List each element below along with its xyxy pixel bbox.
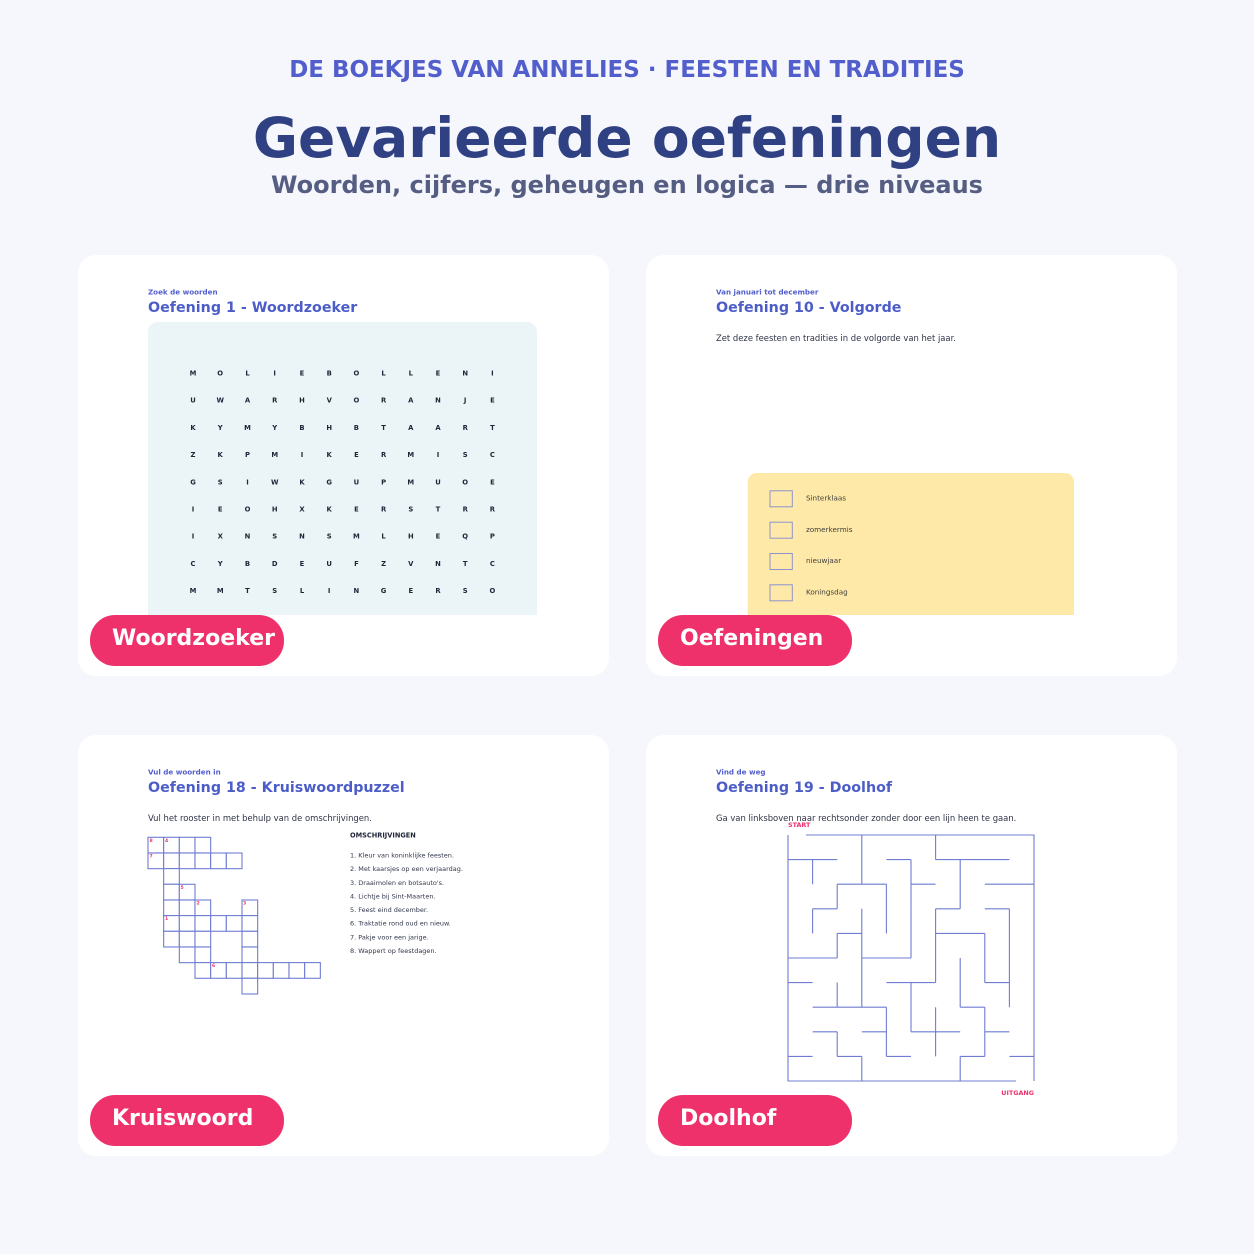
crossword clues: 1. Kleur van koninklijke feesten. <box>350 852 454 860</box>
word search grid: O <box>354 397 360 405</box>
crossword clues: 2. Met kaarsjes op een verjaardag. <box>350 865 463 873</box>
word search grid: B <box>354 424 359 432</box>
word search grid: T <box>463 560 468 568</box>
header label: DE BOEKJES VAN ANNELIES · FEESTEN EN TRADITIES <box>289 57 965 83</box>
panel: kruiswoord <box>78 735 609 1156</box>
checkbox: zomerkermis <box>770 522 853 538</box>
word search grid: A <box>245 397 251 405</box>
crossword grid: 4 <box>165 838 168 844</box>
word search grid <box>148 322 537 642</box>
crossword grid <box>148 837 320 994</box>
checkbox: nieuwjaar: nieuwjaar <box>806 556 841 565</box>
crossword clues: 7. Pakje voor een jarige. <box>350 933 429 941</box>
crossword grid: 3 <box>243 900 246 906</box>
kruiswoord eyebrow: Vul de woorden in <box>148 768 221 777</box>
word search grid: V <box>327 397 333 405</box>
word search grid: W <box>271 478 279 486</box>
word search grid: T <box>436 506 441 514</box>
badge: kruiswoord <box>90 1095 284 1146</box>
crossword clues: 6. Traktatie rond oud en nieuw. <box>350 920 451 928</box>
word search grid: R <box>463 424 469 432</box>
word search grid: S <box>272 533 277 541</box>
checkbox: zomerkermis: zomerkermis <box>806 525 853 534</box>
word search grid: M <box>271 451 278 459</box>
word search grid: L <box>245 370 250 378</box>
word search grid: Y <box>217 560 223 568</box>
word search grid: E <box>354 506 359 514</box>
word search grid: E <box>354 451 359 459</box>
word search grid: L <box>381 370 386 378</box>
word search grid: R <box>381 506 387 514</box>
word search grid: B <box>327 370 332 378</box>
word search grid: B <box>299 424 305 432</box>
word search grid: P <box>381 478 386 486</box>
crossword grid: 8 <box>150 838 153 844</box>
word search grid: E <box>490 478 495 486</box>
word search grid: J <box>463 397 466 405</box>
word search grid: A <box>408 424 414 432</box>
word search grid: K <box>299 478 305 486</box>
word search grid: R <box>272 397 278 405</box>
word search grid: L <box>409 370 414 378</box>
word search grid: I <box>328 587 330 595</box>
word search grid: T <box>490 424 495 432</box>
badge: woordzoeker: Woordzoeker <box>112 626 275 651</box>
word search grid: H <box>299 397 305 405</box>
word search grid: K <box>327 506 333 514</box>
word search grid: U <box>190 397 196 405</box>
word search grid: L <box>381 533 386 541</box>
woordzoeker eyebrow: Zoek de woorden <box>148 288 218 297</box>
checkbox: Sinterklaas: Sinterklaas <box>806 494 846 502</box>
word search grid: W <box>216 397 224 405</box>
word search grid: S <box>272 587 277 595</box>
badge: oefeningen <box>658 615 852 666</box>
crossword grid: 6 <box>212 963 215 969</box>
word search grid: T <box>381 424 386 432</box>
word search grid: Z <box>191 451 196 459</box>
word search grid: E <box>300 560 305 568</box>
kruiswoord heading: Oefening 18 - Kruiswoordpuzzel <box>148 780 405 796</box>
start label: START <box>788 821 811 829</box>
doolhof eyebrow: Vind de weg <box>716 768 766 777</box>
word search grid: M <box>407 478 414 486</box>
word search grid: B <box>245 560 250 568</box>
word search grid: D <box>272 560 278 568</box>
word search grid: O <box>462 478 468 486</box>
title: Gevarieerde oefeningen <box>253 106 1001 170</box>
badge: oefeningen: Oefeningen <box>680 626 823 651</box>
word search grid: G <box>381 587 387 595</box>
crossword clues: 8. Wappert op feestdagen. <box>350 947 437 955</box>
ordering box <box>748 473 1074 615</box>
word search grid: R <box>490 506 496 514</box>
word search grid: E <box>436 533 441 541</box>
checkbox: nieuwjaar <box>770 554 841 570</box>
badge: doolhof: Doolhof <box>680 1106 777 1131</box>
word search grid: R <box>463 506 469 514</box>
word search grid: O <box>217 370 223 378</box>
word search grid: A <box>435 424 441 432</box>
crossword grid: 1 <box>165 916 168 922</box>
volgorde heading: Oefening 10 - Volgorde <box>716 300 901 316</box>
word search grid: N <box>245 533 251 541</box>
word search grid: Y <box>217 424 223 432</box>
word search grid: N <box>299 533 305 541</box>
word search grid: M <box>244 424 251 432</box>
word search grid: E <box>436 370 441 378</box>
badge: kruiswoord: Kruiswoord <box>112 1106 253 1131</box>
word search grid: I <box>273 370 276 378</box>
word search grid: O <box>245 506 251 514</box>
word search grid: U <box>326 560 332 568</box>
volgorde instruction: Zet deze feesten en tradities in de volgorde van het jaar. <box>716 333 956 343</box>
word search grid: U <box>354 478 359 486</box>
word search grid: S <box>463 451 468 459</box>
word search grid: I <box>491 370 494 378</box>
word search grid: L <box>300 587 305 595</box>
crossword clues <box>350 832 463 955</box>
word search grid: Y <box>271 424 277 432</box>
word search grid: R <box>381 397 387 405</box>
word search grid: M <box>217 587 224 595</box>
word search grid: X <box>218 533 224 541</box>
badge: woordzoeker <box>90 615 284 666</box>
word search grid: I <box>246 478 249 486</box>
crossword clues: OMSCHRIJVINGEN <box>350 832 416 840</box>
word search grid: E <box>490 397 495 405</box>
word search grid: H <box>326 424 332 432</box>
word search grid: S <box>463 587 468 595</box>
word search grid: I <box>301 451 303 459</box>
panel: woordzoeker <box>78 255 609 676</box>
doolhof heading: Oefening 19 - Doolhof <box>716 780 893 796</box>
word search grid: U <box>435 478 441 486</box>
volgorde eyebrow: Van januari tot december <box>716 288 819 297</box>
checkbox: Sinterklaas <box>770 491 846 507</box>
word search grid: I <box>192 506 194 514</box>
word search grid: S <box>218 478 223 486</box>
word search grid: R <box>435 587 441 595</box>
word search grid: S <box>408 506 413 514</box>
subtitle: Woorden, cijfers, geheugen en logica — drie niveaus <box>271 171 983 199</box>
word search grid: X <box>299 506 305 514</box>
word search grid: M <box>190 587 197 595</box>
checkbox: Koningsdag <box>770 585 848 601</box>
word search grid: O <box>490 587 496 595</box>
word search grid: T <box>245 587 250 595</box>
badge: doolhof <box>658 1095 852 1146</box>
word search grid: E <box>408 587 413 595</box>
word search grid: Z <box>381 560 386 568</box>
crossword clues: 4. Lichtje bij Sint-Maarten. <box>350 892 436 900</box>
word search grid: G <box>190 478 196 486</box>
woordzoeker heading: Oefening 1 - Woordzoeker <box>148 300 357 316</box>
word search grid: M <box>190 370 197 378</box>
word search grid: E <box>218 506 223 514</box>
word search grid: E <box>300 370 305 378</box>
exit label: UITGANG <box>1001 1089 1034 1097</box>
word search grid: S <box>327 533 332 541</box>
word search grid: N <box>435 397 441 405</box>
doolhof instruction: Ga van linksboven naar rechtsonder zonder door een lijn heen te gaan. <box>716 813 1016 823</box>
word search grid: Q <box>462 533 468 541</box>
word search grid: N <box>354 587 360 595</box>
checkbox: Koningsdag: Koningsdag <box>806 587 848 596</box>
word search grid: M <box>407 451 414 459</box>
crossword clues: 5. Feest eind december. <box>350 906 428 914</box>
word search grid: H <box>408 533 414 541</box>
word search grid: O <box>354 370 360 378</box>
word search grid: C <box>490 451 495 459</box>
kruiswoord instruction: Vul het rooster in met behulp van de omschrijvingen. <box>148 813 372 823</box>
word search grid: I <box>437 451 439 459</box>
word search grid: P <box>245 451 250 459</box>
crossword grid: 2 <box>196 900 200 906</box>
word search grid: K <box>190 424 196 432</box>
word search grid: N <box>435 560 441 568</box>
word search grid: P <box>490 533 495 541</box>
crossword grid: 5 <box>180 885 184 891</box>
word search grid: R <box>381 451 387 459</box>
word search grid: A <box>408 397 414 405</box>
word search grid: M <box>353 533 360 541</box>
word search grid: H <box>272 506 278 514</box>
maze <box>788 835 1034 1081</box>
word search grid: C <box>490 560 495 568</box>
word search grid: I <box>192 533 194 541</box>
word search grid: K <box>327 451 333 459</box>
word search grid: K <box>218 451 224 459</box>
panel: doolhof <box>646 735 1177 1156</box>
panel: volgorde <box>646 255 1177 676</box>
word search grid: V <box>408 560 414 568</box>
crossword grid: 7 <box>150 854 153 860</box>
crossword clues: 3. Draaimolen en botsauto's. <box>350 879 444 887</box>
word search grid: N <box>462 370 468 378</box>
word search grid: C <box>190 560 196 568</box>
word search grid: G <box>326 478 332 486</box>
word search grid: F <box>354 560 359 568</box>
